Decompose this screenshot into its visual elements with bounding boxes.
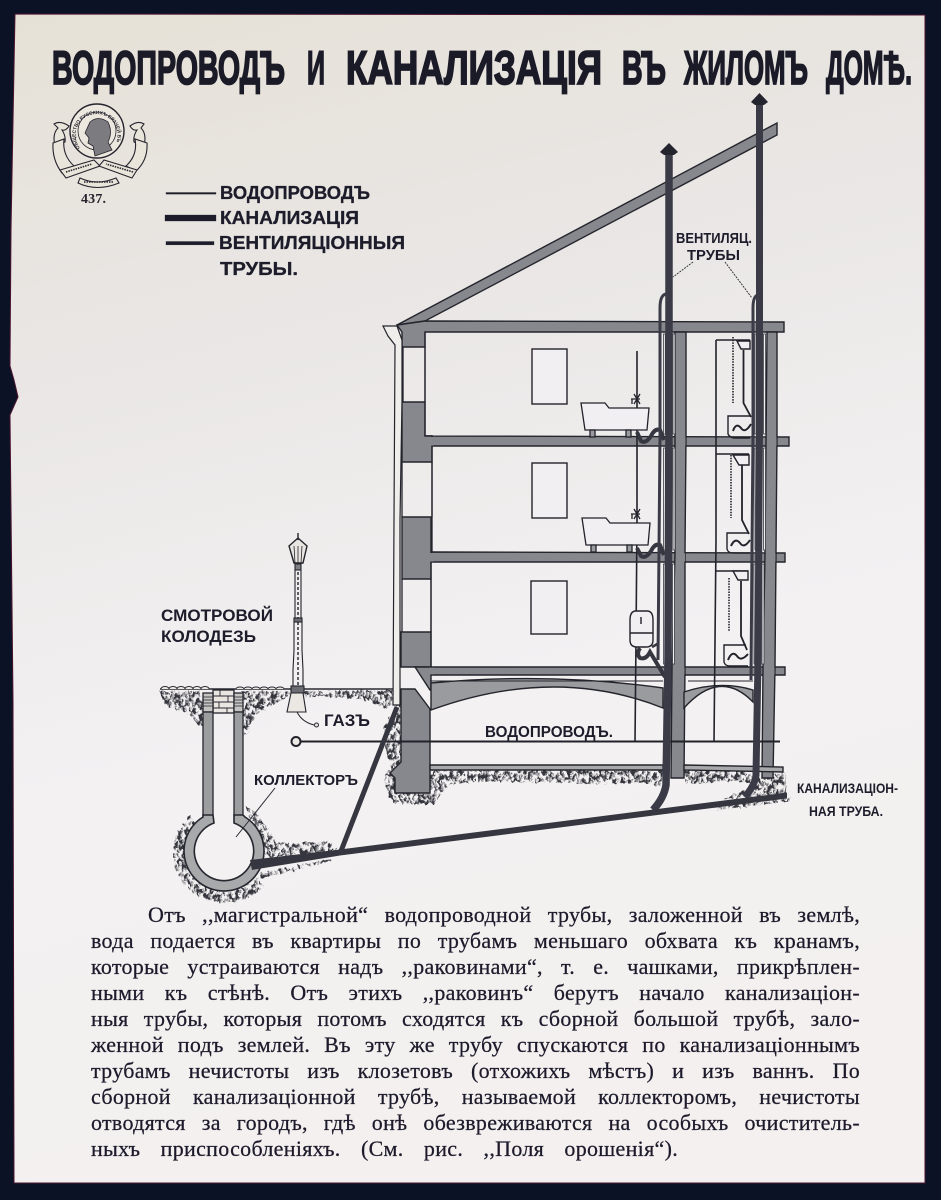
label: water main: ВОДОПРОВОДЪ. bbox=[485, 724, 613, 741]
inspection well and collector bbox=[184, 690, 264, 891]
attic slab and eaves bbox=[397, 321, 784, 347]
body text: вода подается въ квартиры по трубамъ меньшаго обхвата къ кранамъ, bbox=[91, 928, 860, 953]
pipe shaft slots bbox=[664, 334, 766, 664]
drainpipe bbox=[383, 326, 402, 705]
body text: женной подъ землей. Въ эту же трубу спускаются по канализаціоннымъ bbox=[91, 1032, 860, 1057]
title: КАНАЛИЗАЦІЯ bbox=[346, 41, 602, 94]
floor slabs bbox=[425, 436, 789, 446]
toilet middle floor bbox=[716, 454, 750, 553]
toilet upper floor bbox=[716, 337, 751, 438]
legend: water line: ВОДОПРОВОДЪ bbox=[220, 182, 370, 203]
emblem: society medal with ribbons bbox=[52, 103, 148, 188]
title: ВЪ bbox=[622, 41, 666, 94]
secondary ventilation pipes bbox=[658, 294, 758, 680]
body text: отводятся за городъ, гдѣ онѣ обезвреживаются на особыхъ очиститель- bbox=[91, 1110, 860, 1135]
toilet lower floor bbox=[715, 571, 748, 666]
sink cistern ground floor bbox=[630, 611, 665, 677]
legend: ventilation line: ТРУБЫ. bbox=[220, 258, 298, 279]
water main and risers bbox=[292, 340, 780, 746]
collector ring bbox=[184, 815, 264, 891]
gas pipe and label bbox=[297, 711, 370, 730]
label: inspection well: СМОТРОВОЙ bbox=[161, 606, 273, 625]
main ventilation and sewer stacks bbox=[653, 102, 760, 810]
roof bbox=[397, 123, 777, 325]
gas pipe and label: ГАЗЪ bbox=[324, 711, 370, 730]
basement arches bbox=[431, 679, 663, 710]
well shaft walls bbox=[203, 712, 243, 816]
bath upper floor bbox=[581, 394, 664, 442]
label: inspection well: КОЛОДЕЗЬ bbox=[161, 627, 256, 646]
legend: ventilation line: ВЕНТИЛЯЦІОННЫЯ bbox=[219, 232, 405, 253]
ground surface with cobbles bbox=[160, 686, 395, 689]
body text: которые устраиваются надъ ,,раковинами“, т. е. чашками, прикрѣплен- bbox=[91, 954, 860, 979]
body text: трубамъ нечистоты изъ клозетовъ (отхожихъ мѣстъ) и изъ ваннъ. По bbox=[91, 1058, 860, 1083]
label: inspection well bbox=[161, 606, 273, 646]
lower floor wedge bbox=[415, 667, 431, 690]
foundation bbox=[390, 689, 430, 793]
body text: сборной канализаціонной трубѣ, называемой коллекторомъ, нечистоты bbox=[91, 1084, 860, 1109]
emblem medal circle bbox=[70, 104, 124, 158]
title: ЖИЛОМЪ bbox=[683, 41, 808, 94]
label: sewer pipe bbox=[797, 781, 898, 819]
body text: Отъ ,,магистральной“ водопроводной трубы, заложенной въ землѣ, bbox=[148, 902, 860, 927]
wall piers bbox=[402, 402, 432, 462]
interior walls bbox=[671, 332, 686, 778]
emblem ribbons bbox=[53, 122, 147, 188]
title: ВОДОПРОВОДЪ bbox=[52, 41, 285, 94]
legend: ventilation line bbox=[166, 232, 405, 279]
title: И bbox=[307, 41, 325, 94]
body text: ныя трубы, которыя потомъ сходятся къ сборной большой трубѣ, зало- bbox=[91, 1006, 860, 1031]
label: collector bbox=[236, 772, 358, 837]
soil hatching bbox=[160, 690, 791, 897]
well brick head bbox=[203, 690, 243, 713]
street lamp bbox=[287, 533, 307, 712]
label: ventilation pipes: ТРУБЫ bbox=[687, 247, 740, 264]
label: ventilation pipes: ВЕНТИЛЯЦ. bbox=[676, 230, 752, 247]
label: sewer pipe: КАНАЛИЗАЦІОН- bbox=[797, 781, 898, 796]
label: sewer pipe: НАЯ ТРУБА. bbox=[809, 804, 883, 819]
branch sewer from house bbox=[341, 707, 397, 851]
vent caps bbox=[660, 93, 768, 155]
wall and slab junctions bbox=[424, 323, 776, 674]
main sewer pipe bbox=[250, 792, 787, 870]
legend: sewer line bbox=[165, 207, 359, 228]
emblem portrait bbox=[85, 118, 112, 156]
basement floor bbox=[430, 765, 663, 770]
bath middle floor bbox=[582, 509, 664, 557]
body text: ными къ стѣнѣ. Отъ этихъ ,,раковинъ“ берутъ начало канализаціон- bbox=[91, 980, 860, 1005]
body text bbox=[90, 902, 860, 1161]
label: collector: КОЛЛЕКТОРЪ bbox=[254, 772, 358, 789]
building section bbox=[390, 123, 789, 793]
title bbox=[52, 41, 912, 94]
facade and room lines bbox=[402, 332, 753, 681]
emblem number: 437. bbox=[81, 192, 106, 207]
body text: ныхъ приспособленіяхъ. (См. рис. ,,Поля орошенія“). bbox=[91, 1136, 678, 1161]
label: ventilation pipes bbox=[673, 230, 752, 298]
windows bbox=[531, 349, 567, 634]
legend bbox=[165, 182, 405, 279]
legend: sewer line: КАНАЛИЗАЦІЯ bbox=[220, 207, 359, 228]
